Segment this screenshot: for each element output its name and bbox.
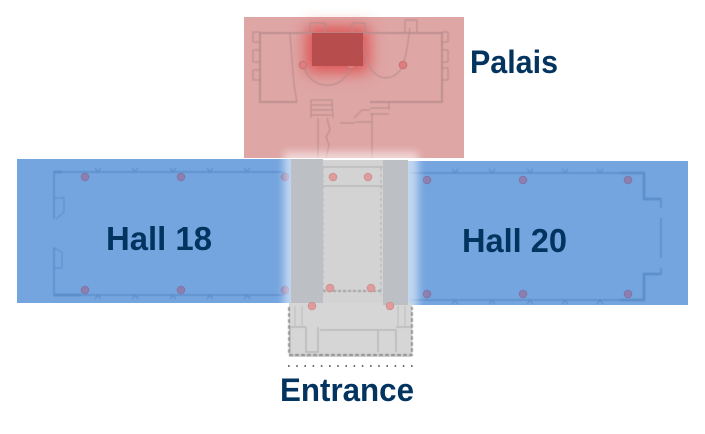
panel: Palais area [244, 17, 464, 158]
entrance dotted line [288, 365, 413, 367]
right grey column [383, 160, 408, 305]
central hall floor [323, 160, 383, 305]
palais floor plan [253, 20, 448, 158]
label: Hall 20: Hall 20 [462, 222, 567, 259]
heat glow [306, 27, 369, 72]
label: Entrance: Entrance [280, 372, 414, 408]
panel: Hall 20 [400, 161, 688, 305]
white glow around central hall [284, 152, 418, 310]
label: Palais: Palais [470, 44, 558, 80]
central hall plan [289, 167, 412, 355]
stage block [312, 33, 363, 66]
hall 18 floor plan [54, 168, 285, 299]
entrance floor [289, 303, 412, 357]
panel: central hall and entrance [284, 152, 418, 357]
pillars [299, 61, 407, 69]
panel: Hall 18 [17, 159, 297, 303]
label: Hall 18: Hall 18 [106, 220, 212, 257]
hall 18 pillars [81, 173, 289, 294]
left grey column [291, 159, 323, 303]
hall 20 pillars [423, 176, 632, 298]
central pillars [308, 173, 394, 310]
hall 20 floor plan [410, 169, 661, 304]
